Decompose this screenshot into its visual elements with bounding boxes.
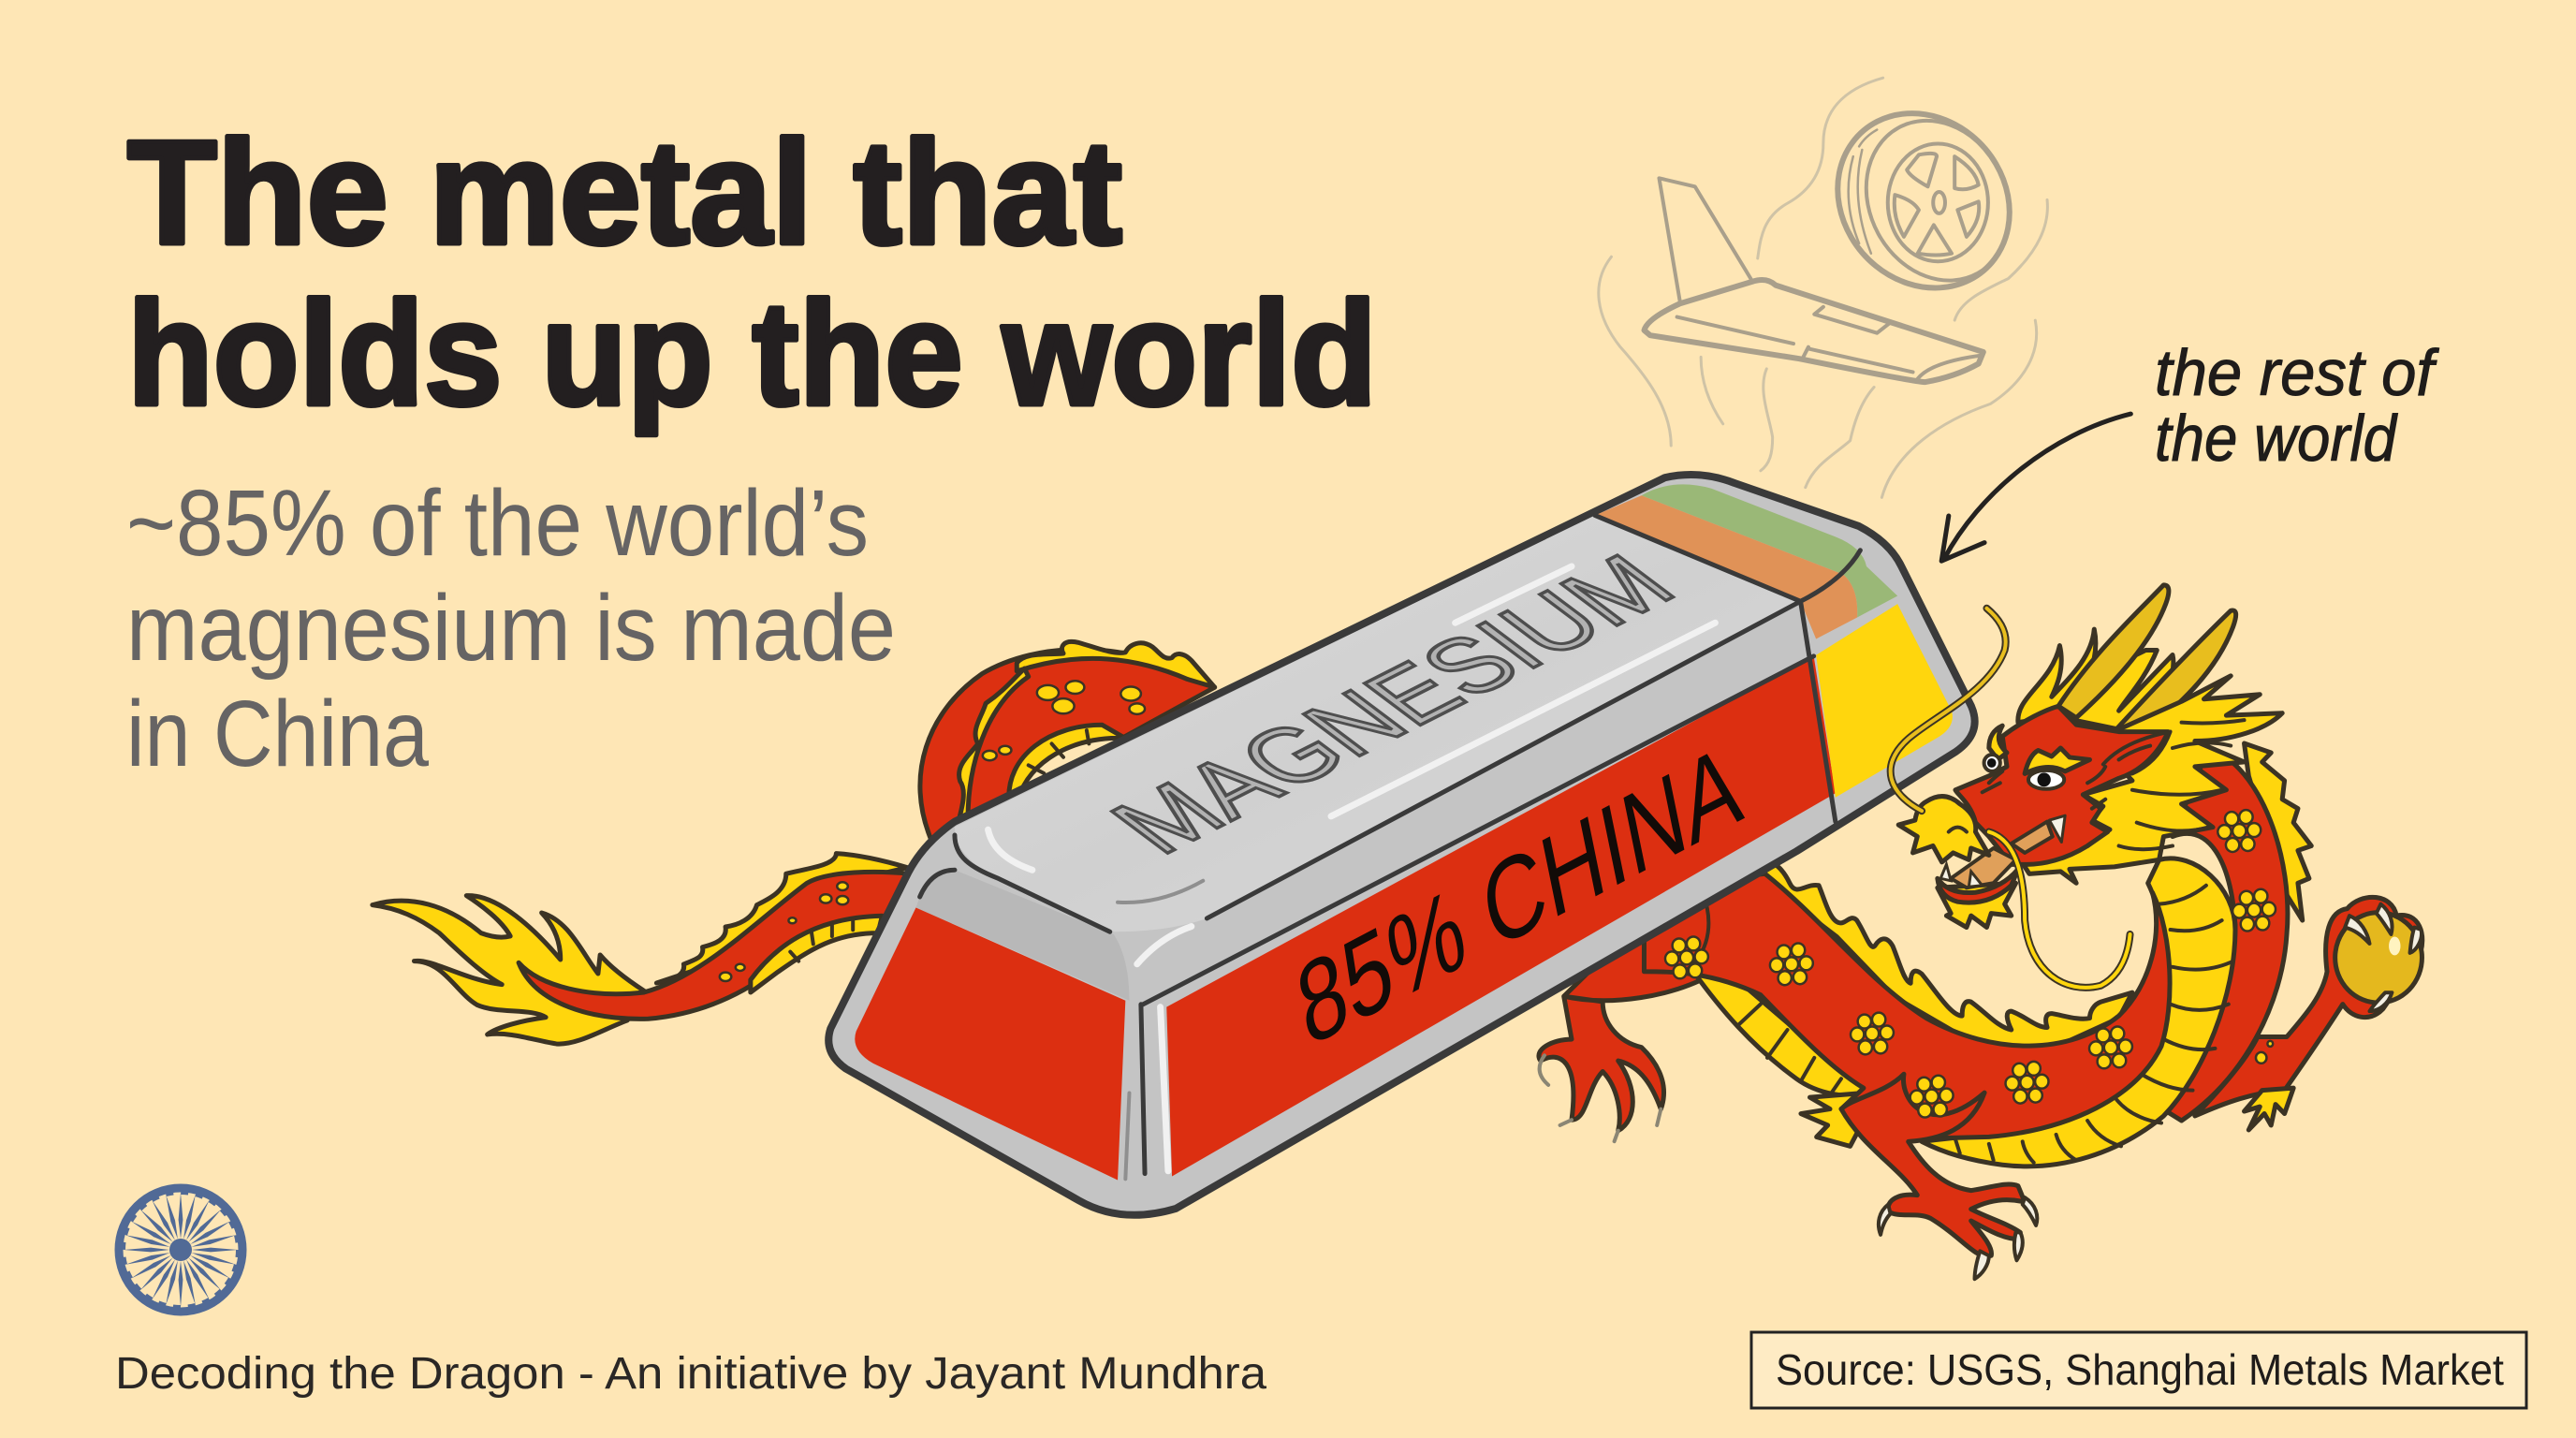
nose — [1898, 797, 1989, 862]
dragon: rear loop and foreleg — [920, 641, 1727, 1141]
ear — [2103, 732, 2171, 773]
lower belly — [1693, 958, 1875, 1096]
mouth — [2012, 822, 2053, 853]
lower jaw — [1938, 869, 2018, 902]
yellow end — [1816, 604, 1953, 798]
body — [1644, 873, 2170, 1139]
dragon pearl — [2335, 913, 2422, 1003]
subtitle: ~85% of the world’s — [126, 471, 869, 576]
far brow and eye — [1989, 726, 2007, 759]
horn 2 — [2110, 610, 2236, 741]
title: The metal that — [127, 110, 1122, 275]
heat wisps — [1599, 78, 2047, 497]
arm — [2195, 897, 2422, 1116]
front red face — [1166, 656, 1836, 1176]
beard — [1938, 883, 2016, 928]
loop outer red — [920, 650, 1215, 841]
loop inner fin — [957, 668, 1029, 827]
dragon: tail — [373, 854, 909, 1044]
fang — [2049, 815, 2065, 842]
icon: aircraft wing and wheel sketches with heat wisps — [1599, 78, 2047, 497]
highlights — [988, 566, 1715, 1171]
neck fin — [2245, 743, 2311, 920]
dragon: head — [1891, 585, 2282, 988]
scales — [1665, 810, 2276, 1118]
arm claws — [2345, 904, 2422, 1011]
tail body — [519, 872, 909, 1019]
top face — [955, 515, 1805, 932]
dragon: main body — [1644, 743, 2422, 1279]
rear leg — [1841, 1074, 2025, 1256]
green band — [1642, 484, 1897, 618]
belly band — [1922, 858, 2235, 1167]
eye — [2025, 748, 2089, 773]
ingot body — [828, 475, 1975, 1215]
orange band — [1595, 495, 1857, 638]
wheel — [1822, 109, 2025, 293]
neck band — [2159, 748, 2288, 1121]
handwritten annotation — [2155, 336, 2439, 475]
foreleg — [1539, 905, 1727, 1131]
head — [1955, 706, 2168, 864]
whisker upper — [1891, 609, 2006, 811]
source box — [1751, 1332, 2526, 1408]
title: holds up the world — [127, 271, 1377, 436]
crest — [2018, 629, 2174, 743]
whisker lower — [1989, 832, 2130, 988]
label: MAGNESIUM: MAGNESIUM — [1088, 538, 1697, 870]
arm tuft — [2245, 1088, 2293, 1130]
handwritten annotation: the world — [2155, 402, 2398, 475]
horn 1 — [2058, 585, 2169, 718]
source box: Source: USGS, Shanghai Metals Market — [1776, 1345, 2504, 1394]
footer credit: Decoding the Dragon - An initiative by Jayant Mundhra — [115, 1349, 1266, 1399]
subtitle: magnesium is made — [126, 576, 896, 681]
title — [127, 110, 1377, 436]
loop inner belly — [1009, 725, 1125, 803]
mane — [2020, 676, 2282, 883]
subtitle — [126, 471, 896, 786]
ingot edges — [920, 515, 1860, 1174]
magnesium ingot — [828, 475, 1975, 1215]
head lines — [1983, 767, 2105, 809]
tail belly — [751, 916, 882, 992]
rear claws — [1879, 1197, 2037, 1279]
back fin — [1761, 859, 2132, 1050]
icon: Ashoka Chakra — [119, 1188, 242, 1312]
left red face — [855, 907, 1125, 1180]
left bevel — [915, 870, 1129, 1001]
arrow — [1941, 414, 2130, 561]
tongue — [1951, 848, 2016, 888]
loop top fin — [1017, 641, 1215, 687]
lower fur — [1801, 1093, 1868, 1146]
wing — [1645, 178, 1983, 382]
label: 85% CHINA: 85% CHINA — [1287, 719, 1749, 1071]
foreleg shoulder line — [1685, 883, 1708, 972]
subtitle: in China — [126, 682, 429, 786]
handwritten annotation: the rest of — [2155, 336, 2439, 409]
tail flame — [373, 896, 644, 1044]
tail fin — [656, 854, 907, 983]
